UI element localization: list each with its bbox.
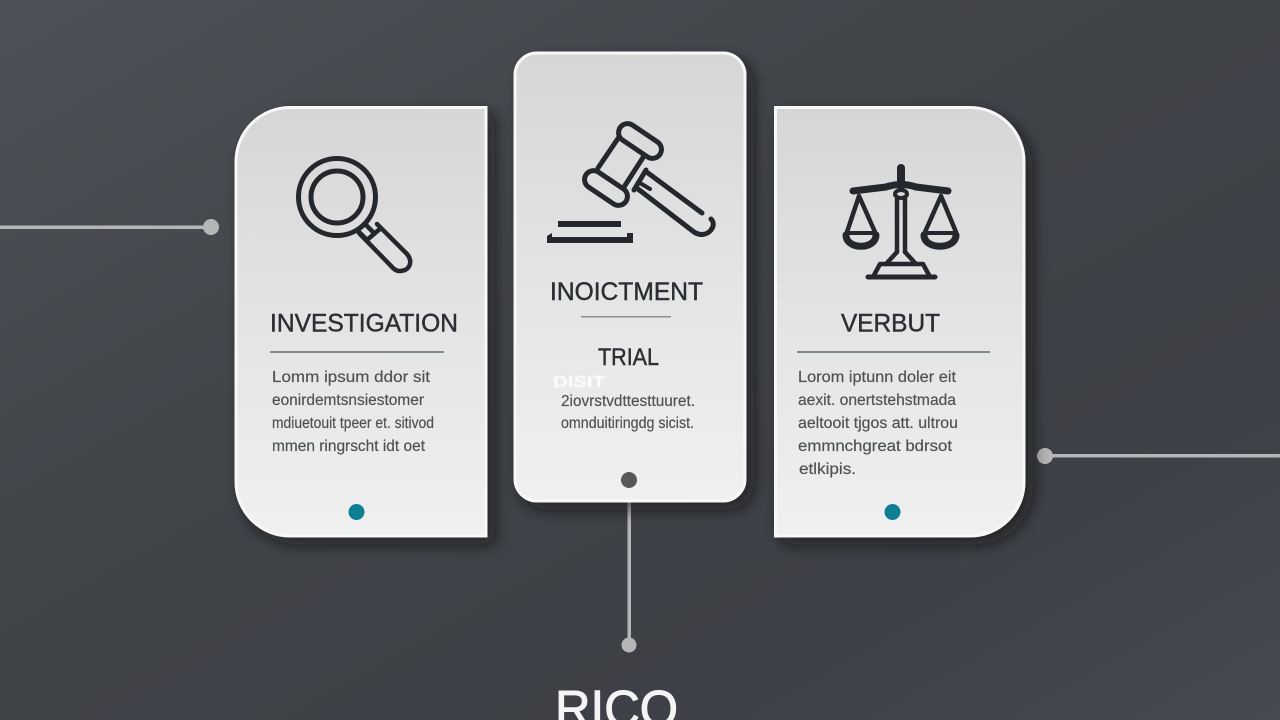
- body text: mmen ringrscht idt oet: [272, 438, 426, 455]
- body text: 2iovrstvdttesttuuret.: [561, 393, 695, 410]
- body text: emmnchgreat bdrsot: [798, 438, 953, 455]
- divider: [581, 316, 671, 318]
- icon: scales of justice: [846, 168, 956, 277]
- heading: verdict: VERBUT: [841, 310, 940, 338]
- body text: Lorom iptunn doler eit: [798, 369, 957, 386]
- right connector: [1037, 448, 1280, 464]
- body text: [561, 393, 695, 432]
- left connector: [0, 219, 219, 235]
- body text: mdiuetouit tpeer et. sitivod: [272, 415, 434, 432]
- panel: investigation: [236, 108, 486, 536]
- divider: [270, 351, 444, 353]
- body text: aeltooit tjgos att. ultrou: [798, 415, 958, 432]
- faded label: DISIT: [553, 374, 605, 391]
- card background: [776, 108, 1024, 536]
- body text: [272, 369, 434, 455]
- body text: Lomm ipsum ddor sit: [272, 369, 431, 386]
- body text: aexit. onertstehstmada: [798, 392, 956, 409]
- body text: eonirdemtsnsiestomer: [272, 392, 424, 409]
- body text: [798, 369, 958, 478]
- icon: gavel base: [547, 221, 633, 243]
- panel: verdict: [776, 108, 1024, 536]
- body text: etlkipis.: [799, 461, 856, 478]
- icon: magnifying glass: [298, 158, 410, 271]
- status dot: [348, 504, 364, 520]
- divider: [797, 351, 990, 353]
- heading: trial: TRIAL: [598, 344, 659, 371]
- card background: [515, 53, 745, 501]
- bottom connector: [622, 500, 636, 652]
- heading: investigation: INVESTIGATION: [270, 310, 458, 338]
- status dot: [621, 472, 637, 488]
- card background: [236, 108, 486, 536]
- panel: indictment and trial: [515, 53, 745, 501]
- status dot: [884, 504, 900, 520]
- icon: gavel: [581, 120, 713, 234]
- body text: omnduitiringdg sicist.: [561, 415, 694, 432]
- heading: indictment: INOICTMENT: [550, 278, 703, 306]
